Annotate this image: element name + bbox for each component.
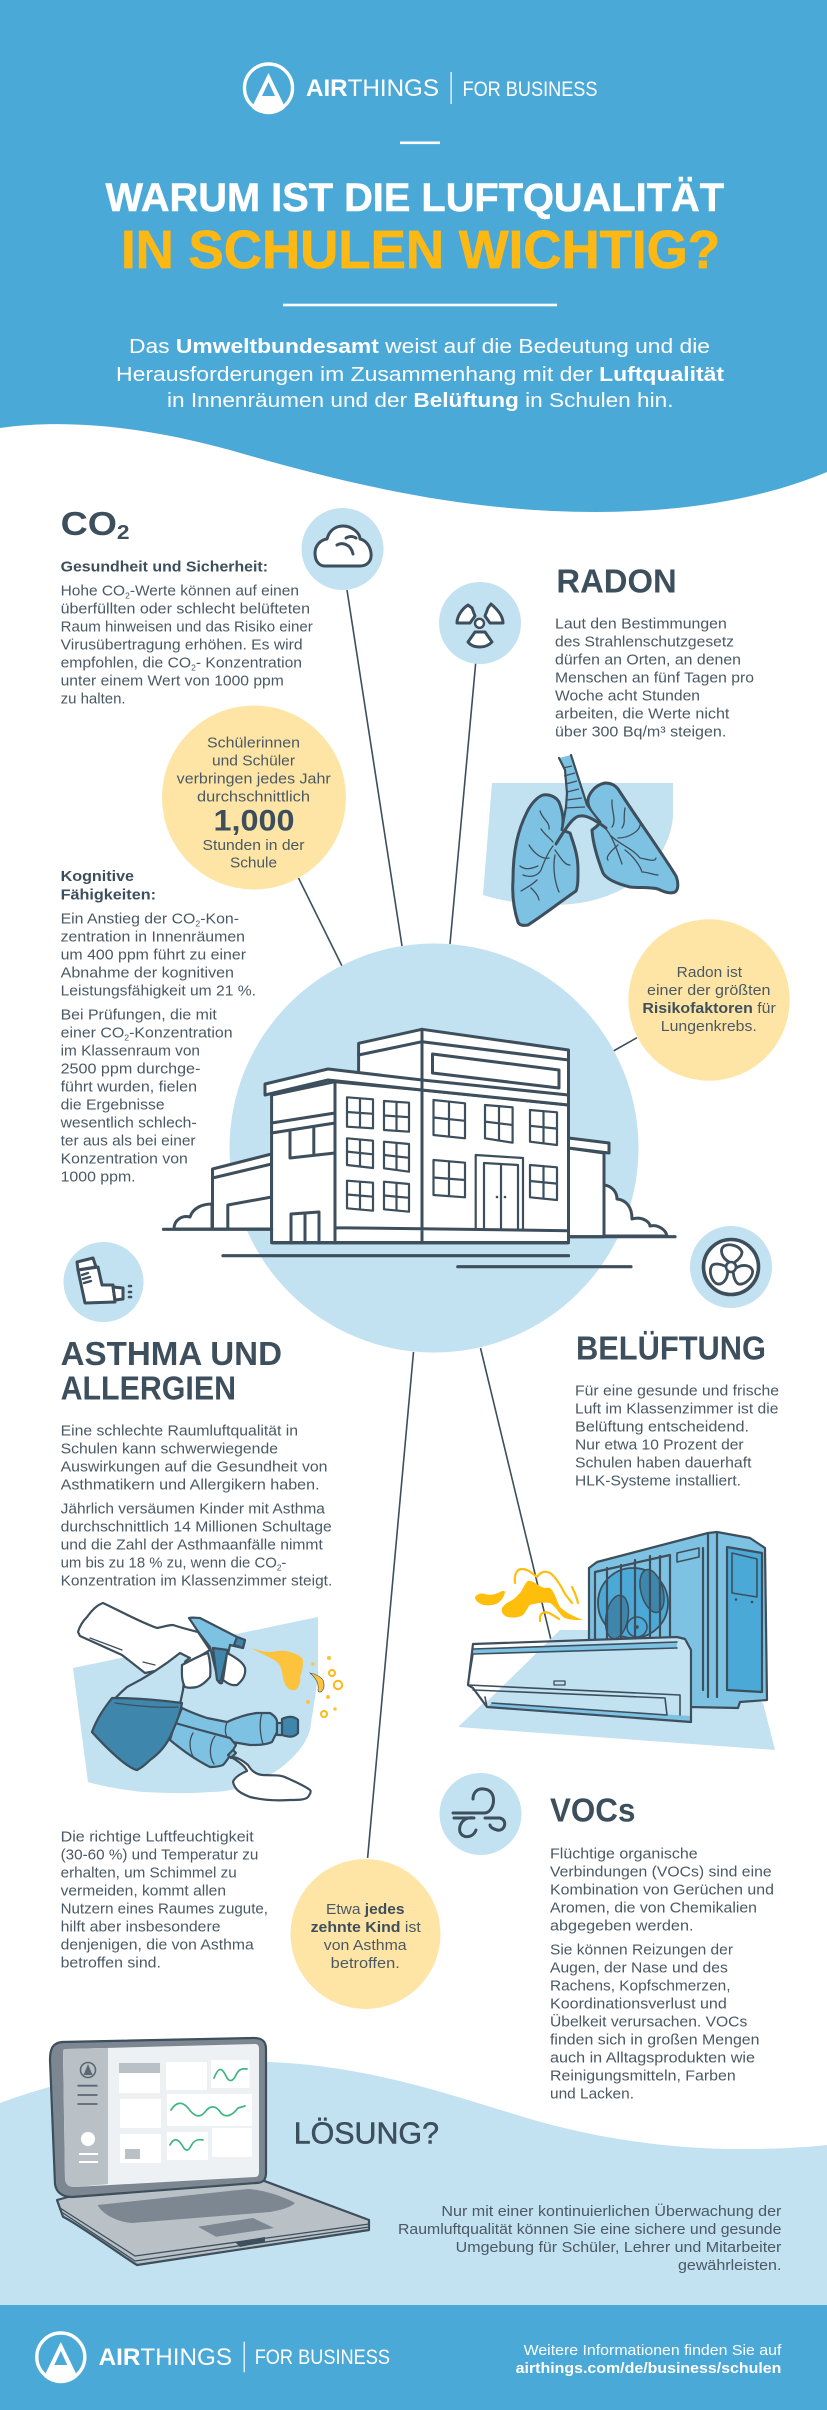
text: cognitive abilities: Ein Anstieg der CO: [61, 911, 185, 927]
text: asthma and allergies: Jährlich versäumen Kinder mit Asthma: [61, 1502, 326, 1518]
icon: wind: [440, 1773, 522, 1855]
text: ventilation: Nur etwa 10 Prozent der: [575, 1438, 744, 1454]
callout: 1,000 hours: Schülerinnen: [207, 736, 300, 752]
text: CO2 health and safety: unter einem Wert von 1000 ppm: [61, 673, 284, 689]
heading: CO2: 2: [117, 522, 130, 544]
text: CO2 health and safety: 2: [125, 591, 130, 600]
text: cognitive abilities: Konzentration von: [61, 1151, 188, 1167]
callout: 1,000 hours: Stunden in der: [202, 838, 305, 854]
text: cognitive abilities: 2: [195, 919, 201, 928]
text: cognitive abilities: 2: [124, 1033, 130, 1042]
illustration: cleaning spray: [73, 1603, 342, 1800]
icon: fan: [690, 1226, 772, 1308]
text: VOCs: Flüchtige organische: [550, 1847, 698, 1863]
heading: ventilation: BELÜFTUNG: [576, 1329, 766, 1366]
icon: inhaler: [64, 1242, 144, 1322]
heading: Asthma and allergies: ASTHMA UND: [61, 1335, 282, 1372]
text: CO2 health and safety: 2: [191, 663, 196, 672]
text: VOCs: Verbindungen (VOCs) sind eine: [550, 1865, 772, 1881]
text: ventilation: Für eine gesunde und frische: [575, 1384, 779, 1400]
text: VOCs: Aromen, die von Chemikalien: [550, 1901, 757, 1917]
text: CO2 health and safety: empfohlen, die CO: [61, 655, 182, 671]
text: asthma and allergies: um bis zu 18 % zu, wenn die CO: [61, 1556, 272, 1572]
text: humidity: Die richtige Luftfeuchtigkeit: [61, 1830, 254, 1846]
panel: light blue solution wave: [0, 2062, 827, 2306]
intro text: Das Umweltbundesamt weist auf die Bedeutung und die: [129, 336, 710, 358]
callout: one in ten children: von Asthma: [324, 1938, 408, 1954]
text: cognitive abilities: Fähigkeiten:: [61, 887, 156, 903]
text: solution: gewährleisten.: [678, 2258, 781, 2274]
logo: Airthings for business header: AIRTHINGS: [306, 75, 439, 102]
text: VOCs: Kombination von Gerüchen und: [550, 1883, 774, 1899]
connector line: ventilation: [480, 1348, 551, 1640]
text: humidity: Nutzern eines Raumes zugute,: [61, 1902, 268, 1918]
intro text: in Innenräumen und der Belüftung in Schulen hin.: [167, 390, 674, 412]
text: humidity: denjenigen, die von Asthma: [61, 1938, 255, 1954]
text: asthma and allergies: Eine schlechte Raumluftqualität in: [61, 1424, 298, 1440]
text: ventilation: Schulen haben dauerhaft: [575, 1456, 752, 1472]
text: asthma and allergies: durchschnittlich 14 Millionen Schultage: [61, 1520, 332, 1536]
heading: CO2: CO: [61, 505, 110, 542]
text: ventilation: Luft im Klassenzimmer ist die: [575, 1402, 778, 1418]
text: VOCs: Augen, der Nase und des: [550, 1961, 728, 1977]
callout: 1,000 hours: und Schüler: [212, 754, 295, 770]
text: solution: Umgebung für Schüler, Lehrer und Mitarbeiter: [456, 2240, 782, 2256]
text: CO2 health and safety: Gesundheit und Sicherheit:: [61, 560, 268, 576]
title: WARUM IST DIE LUFTQUALITÄT: [106, 176, 724, 220]
text: VOCs: Übelkeit verursachen. VOCs: [550, 2013, 747, 2031]
text: humidity: [61, 1830, 268, 1972]
text: further information link: Weitere Informationen finden Sie auf: [524, 2343, 782, 2359]
text: solution: [398, 2202, 782, 2274]
text: cognitive abilities: 2500 ppm durchge-: [61, 1061, 201, 1077]
text: cognitive abilities: 1000 ppm.: [61, 1169, 136, 1185]
callout: radon risk factor: Lungenkrebs.: [661, 1019, 757, 1035]
text: asthma and allergies: Konzentration im Klassenzimmer steigt.: [61, 1574, 332, 1590]
heading: solution: LÖSUNG?: [294, 2115, 439, 2150]
callout: 1,000 hours: durchschnittlich: [197, 790, 310, 806]
text: further information link: airthings.com/de/business/schulen: [516, 2361, 781, 2377]
heading: Asthma and allergies: [61, 1335, 282, 1406]
text: cognitive abilities: einer CO: [61, 1025, 119, 1041]
text: CO2 health and safety: - Konzentration: [196, 655, 302, 671]
text: humidity: (30-60 %) und Temperatur zu: [61, 1848, 258, 1864]
callout: radon risk factor: einer der größten: [647, 983, 770, 999]
text: cognitive abilities: [60, 869, 256, 1185]
callout: 1,000 hours: Schule: [230, 856, 277, 872]
text: CO2 health and safety: zu halten.: [61, 691, 126, 707]
text: asthma and allergies: 2: [277, 1564, 282, 1573]
illustration: school building: [164, 1029, 675, 1267]
logo: Airthings for business header: FOR BUSINESS: [462, 78, 598, 101]
logo: Airthings for business footer: AIRTHINGS: [99, 2344, 232, 2371]
text: cognitive abilities: führt wurden, fielen: [61, 1079, 197, 1095]
text: asthma and allergies: und die Zahl der Asthmaanfälle nimmt: [61, 1538, 323, 1554]
text: humidity: vermeiden, kommt allen: [61, 1884, 226, 1900]
intro text: [116, 336, 724, 412]
text: VOCs: abgegeben werden.: [550, 1919, 694, 1935]
text: cognitive abilities: um 400 ppm führt zu einer: [61, 947, 246, 963]
text: ventilation: [575, 1384, 779, 1490]
heading: VOCs: VOCs: [550, 1792, 635, 1829]
text: asthma and allergies: [61, 1424, 332, 1590]
logo: Airthings for business footer: FOR BUSINESS: [255, 2346, 390, 2369]
text: asthma and allergies: Auswirkungen auf die Gesundheit von: [61, 1460, 327, 1476]
text: radon: Woche acht Stunden: [555, 689, 700, 705]
illustration: laptop with dashboard: [50, 2038, 369, 2265]
intro text: Herausforderungen im Zusammenhang mit der Luftqualität: [116, 364, 724, 386]
text: CO2 health and safety: -Werte können auf einen: [130, 583, 299, 599]
text: humidity: erhalten, um Schimmel zu: [61, 1866, 237, 1882]
callout: radon risk factor: [628, 919, 790, 1081]
callout: radon risk factor: Radon ist: [677, 965, 742, 981]
text: VOCs: und Lacken.: [550, 2087, 634, 2103]
text: radon: über 300 Bq/m³ steigen.: [555, 725, 726, 741]
text: further information link: [516, 2343, 782, 2377]
panel: blue header background with wave: [0, 0, 827, 512]
callout: 1,000 hours: [162, 706, 346, 890]
connector lines: [298, 590, 637, 1858]
text: ventilation: Belüftung entscheidend.: [575, 1420, 749, 1436]
text: VOCs: Rachens, Kopfschmerzen,: [550, 1979, 730, 1995]
text: CO2 health and safety: Virusübertragung erhöhen. Es wird: [61, 637, 303, 653]
text: cognitive abilities: Leistungsfähigkeit um 21 %.: [61, 983, 256, 999]
callout: one in ten children: zehnte Kind ist: [311, 1920, 421, 1936]
text: cognitive abilities: wesentlich schlech-: [60, 1115, 197, 1131]
heading: Radon: RADON: [556, 563, 677, 600]
icon: radiation: [439, 582, 521, 664]
text: humidity: hilft aber insbesondere: [61, 1920, 220, 1936]
illustration: lungs: [483, 755, 678, 925]
icon: cloud: [302, 508, 384, 590]
callout: one in ten children: [290, 1859, 440, 2009]
text: cognitive abilities: -Kon-: [200, 911, 239, 927]
text: VOCs: finden sich in großen Mengen: [550, 2033, 760, 2049]
central circle: [230, 944, 638, 1352]
logo: Airthings for business header: [244, 64, 598, 114]
text: cognitive abilities: im Klassenraum von: [61, 1043, 200, 1059]
illustration: air conditioner: [458, 1532, 775, 1750]
text: VOCs: [550, 1847, 774, 2103]
text: cognitive abilities: Abnahme der kognitiven: [61, 965, 234, 981]
callout: one in ten children: Etwa jedes: [326, 1902, 405, 1918]
text: cognitive abilities: -Konzentration: [129, 1025, 233, 1041]
callout: 1,000 hours: 1,000: [214, 805, 294, 838]
text: cognitive abilities: zentration in Innenräumen: [61, 929, 245, 945]
text: cognitive abilities: ter aus als bei einer: [61, 1133, 196, 1149]
text: cognitive abilities: Kognitive: [61, 869, 134, 885]
callout: 1,000 hours: verbringen jedes Jahr: [177, 772, 331, 788]
text: CO2 health and safety: Raum hinweisen und das Risiko einer: [61, 619, 313, 635]
text: asthma and allergies: Schulen kann schwerwiegende: [61, 1442, 278, 1458]
title: IN SCHULEN WICHTIG?: [121, 220, 720, 280]
text: VOCs: Sie können Reizungen der: [550, 1943, 733, 1959]
text: radon: Menschen an fünf Tagen pro: [555, 671, 754, 687]
text: radon: Laut den Bestimmungen: [555, 617, 727, 633]
text: CO2 health and safety: [61, 560, 313, 707]
text: humidity: betroffen sind.: [61, 1956, 161, 1972]
text: CO2 health and safety: überfüllten oder schlecht belüfteten: [61, 601, 310, 617]
text: cognitive abilities: die Ergebnisse: [61, 1097, 165, 1113]
text: solution: Raumluftqualität können Sie eine sichere und gesunde: [398, 2222, 781, 2238]
text: CO2 health and safety: Hohe CO: [61, 583, 121, 599]
callout: radon risk factor: Risikofaktoren für: [642, 1001, 776, 1017]
text: VOCs: auch in Alltagsprodukten wie: [550, 2051, 755, 2067]
text: VOCs: Reinigungsmitteln, Farben: [550, 2069, 736, 2085]
heading: Asthma and allergies: ALLERGIEN: [61, 1369, 236, 1406]
text: solution: Nur mit einer kontinuierlichen Überwachung der: [441, 2202, 782, 2220]
title: [106, 176, 724, 280]
text: radon: des Strahlenschutzgesetz: [555, 635, 734, 651]
callout: one in ten children: betroffen.: [331, 1956, 400, 1972]
text: asthma and allergies: -: [281, 1556, 287, 1572]
text: radon: dürfen an Orten, an denen: [555, 653, 741, 669]
text: radon: arbeiten, die Werte nicht: [555, 707, 729, 723]
text: ventilation: HLK-Systeme installiert.: [575, 1474, 741, 1490]
logo: Airthings for business footer: [37, 2333, 390, 2383]
text: asthma and allergies: Asthmatikern und Allergikern haben.: [61, 1478, 320, 1494]
text: radon: [555, 617, 754, 741]
text: cognitive abilities: Bei Prüfungen, die mit: [61, 1007, 217, 1023]
text: VOCs: Koordinationsverlust und: [550, 1997, 727, 2013]
panel: footer: [0, 2305, 827, 2410]
